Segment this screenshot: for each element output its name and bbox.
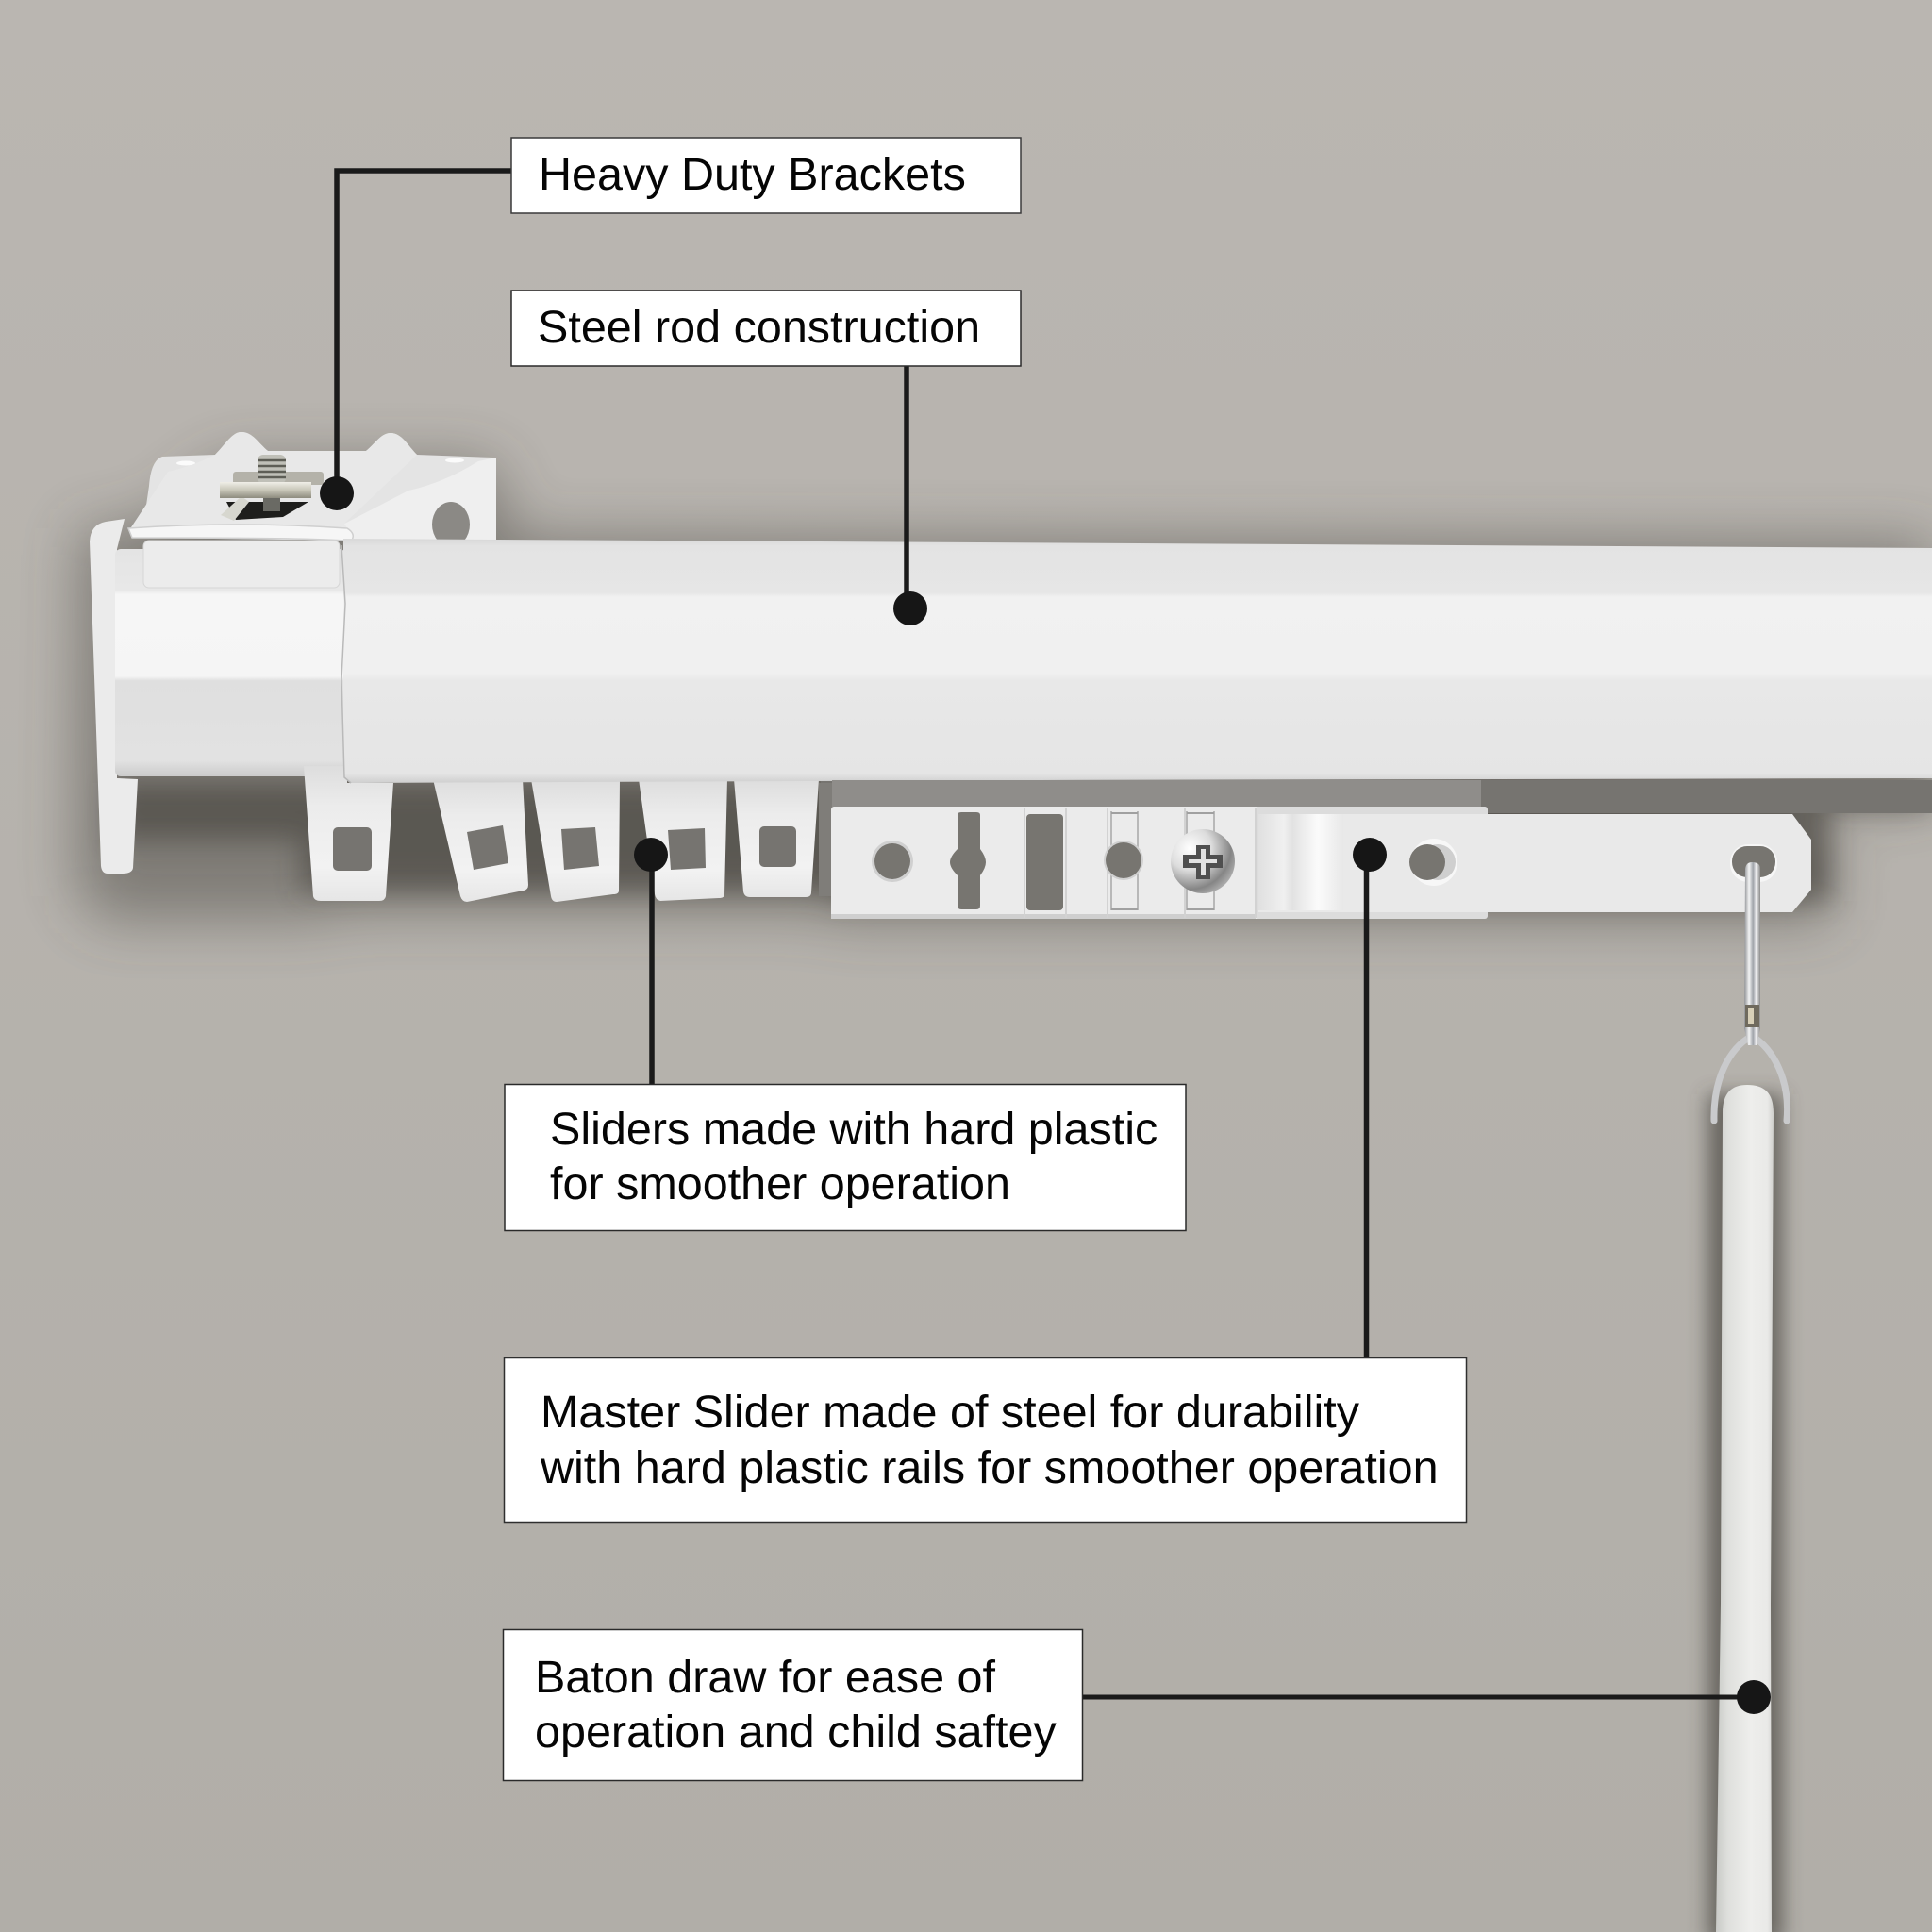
- callout: heavy duty brackets: [320, 138, 1021, 510]
- leader line: [337, 171, 511, 493]
- callout: sliders: [505, 838, 1186, 1230]
- curtain rod assembly: [90, 432, 1932, 919]
- callout: master slider: [504, 838, 1466, 1523]
- label text: Heavy Duty Brackets: [539, 149, 966, 200]
- clip on top of end section: [143, 541, 340, 588]
- label text: Steel rod construction: [538, 302, 980, 353]
- leader line: [649, 855, 655, 1084]
- rear mounting bracket: [142, 432, 496, 547]
- baton draw with hook: [1714, 862, 1788, 1932]
- baton: [1716, 1085, 1774, 1932]
- callout: steel rod construction: [511, 291, 1021, 625]
- slider 2: [433, 779, 528, 902]
- master slider carrier: [819, 780, 1488, 919]
- leader dot: [634, 838, 668, 872]
- main rod: [343, 539, 1932, 783]
- label box: [504, 1630, 1083, 1781]
- end section of rod: [115, 549, 345, 776]
- hook stirrup: [1714, 1036, 1788, 1121]
- leader line: [904, 366, 909, 604]
- arm end slot: [1730, 844, 1777, 882]
- label text: Sliders made with hard plastic: [550, 1104, 1158, 1155]
- label box: [511, 291, 1021, 366]
- leader line: [1364, 855, 1369, 1357]
- slider 4: [639, 779, 727, 901]
- sliders: [304, 766, 819, 902]
- label text: operation and child saftey: [535, 1707, 1057, 1757]
- master slider arm: [1258, 814, 1811, 912]
- rod joint: [341, 545, 351, 783]
- arm hole: [1409, 839, 1457, 886]
- leader dot: [893, 591, 927, 625]
- label text: with hard plastic rails for smoother operation: [540, 1442, 1439, 1493]
- carrier holes and slots: [872, 808, 1256, 918]
- carrier screw: [1171, 829, 1235, 893]
- slider 3: [531, 779, 620, 902]
- leader dot: [1737, 1680, 1771, 1714]
- label text: Master Slider made of steel for durability: [541, 1387, 1360, 1438]
- leader dot: [320, 476, 354, 510]
- label box: [504, 1358, 1466, 1523]
- slanted bracket top plate: [128, 432, 417, 541]
- label text: for smoother operation: [550, 1158, 1010, 1209]
- slider 1: [304, 766, 393, 901]
- soft shadow behind the rod assembly: [75, 462, 1932, 1932]
- leader line: [1083, 1694, 1754, 1700]
- callout: baton draw: [504, 1630, 1771, 1781]
- label box: [505, 1085, 1186, 1230]
- slider 5: [734, 779, 819, 897]
- bracket screw and nut: [220, 455, 324, 521]
- label box: [511, 138, 1021, 213]
- label text: Baton draw for ease of: [535, 1652, 996, 1703]
- leader dot: [1353, 838, 1387, 872]
- end stop bracket: [90, 519, 138, 874]
- hook wire: [1744, 862, 1760, 1045]
